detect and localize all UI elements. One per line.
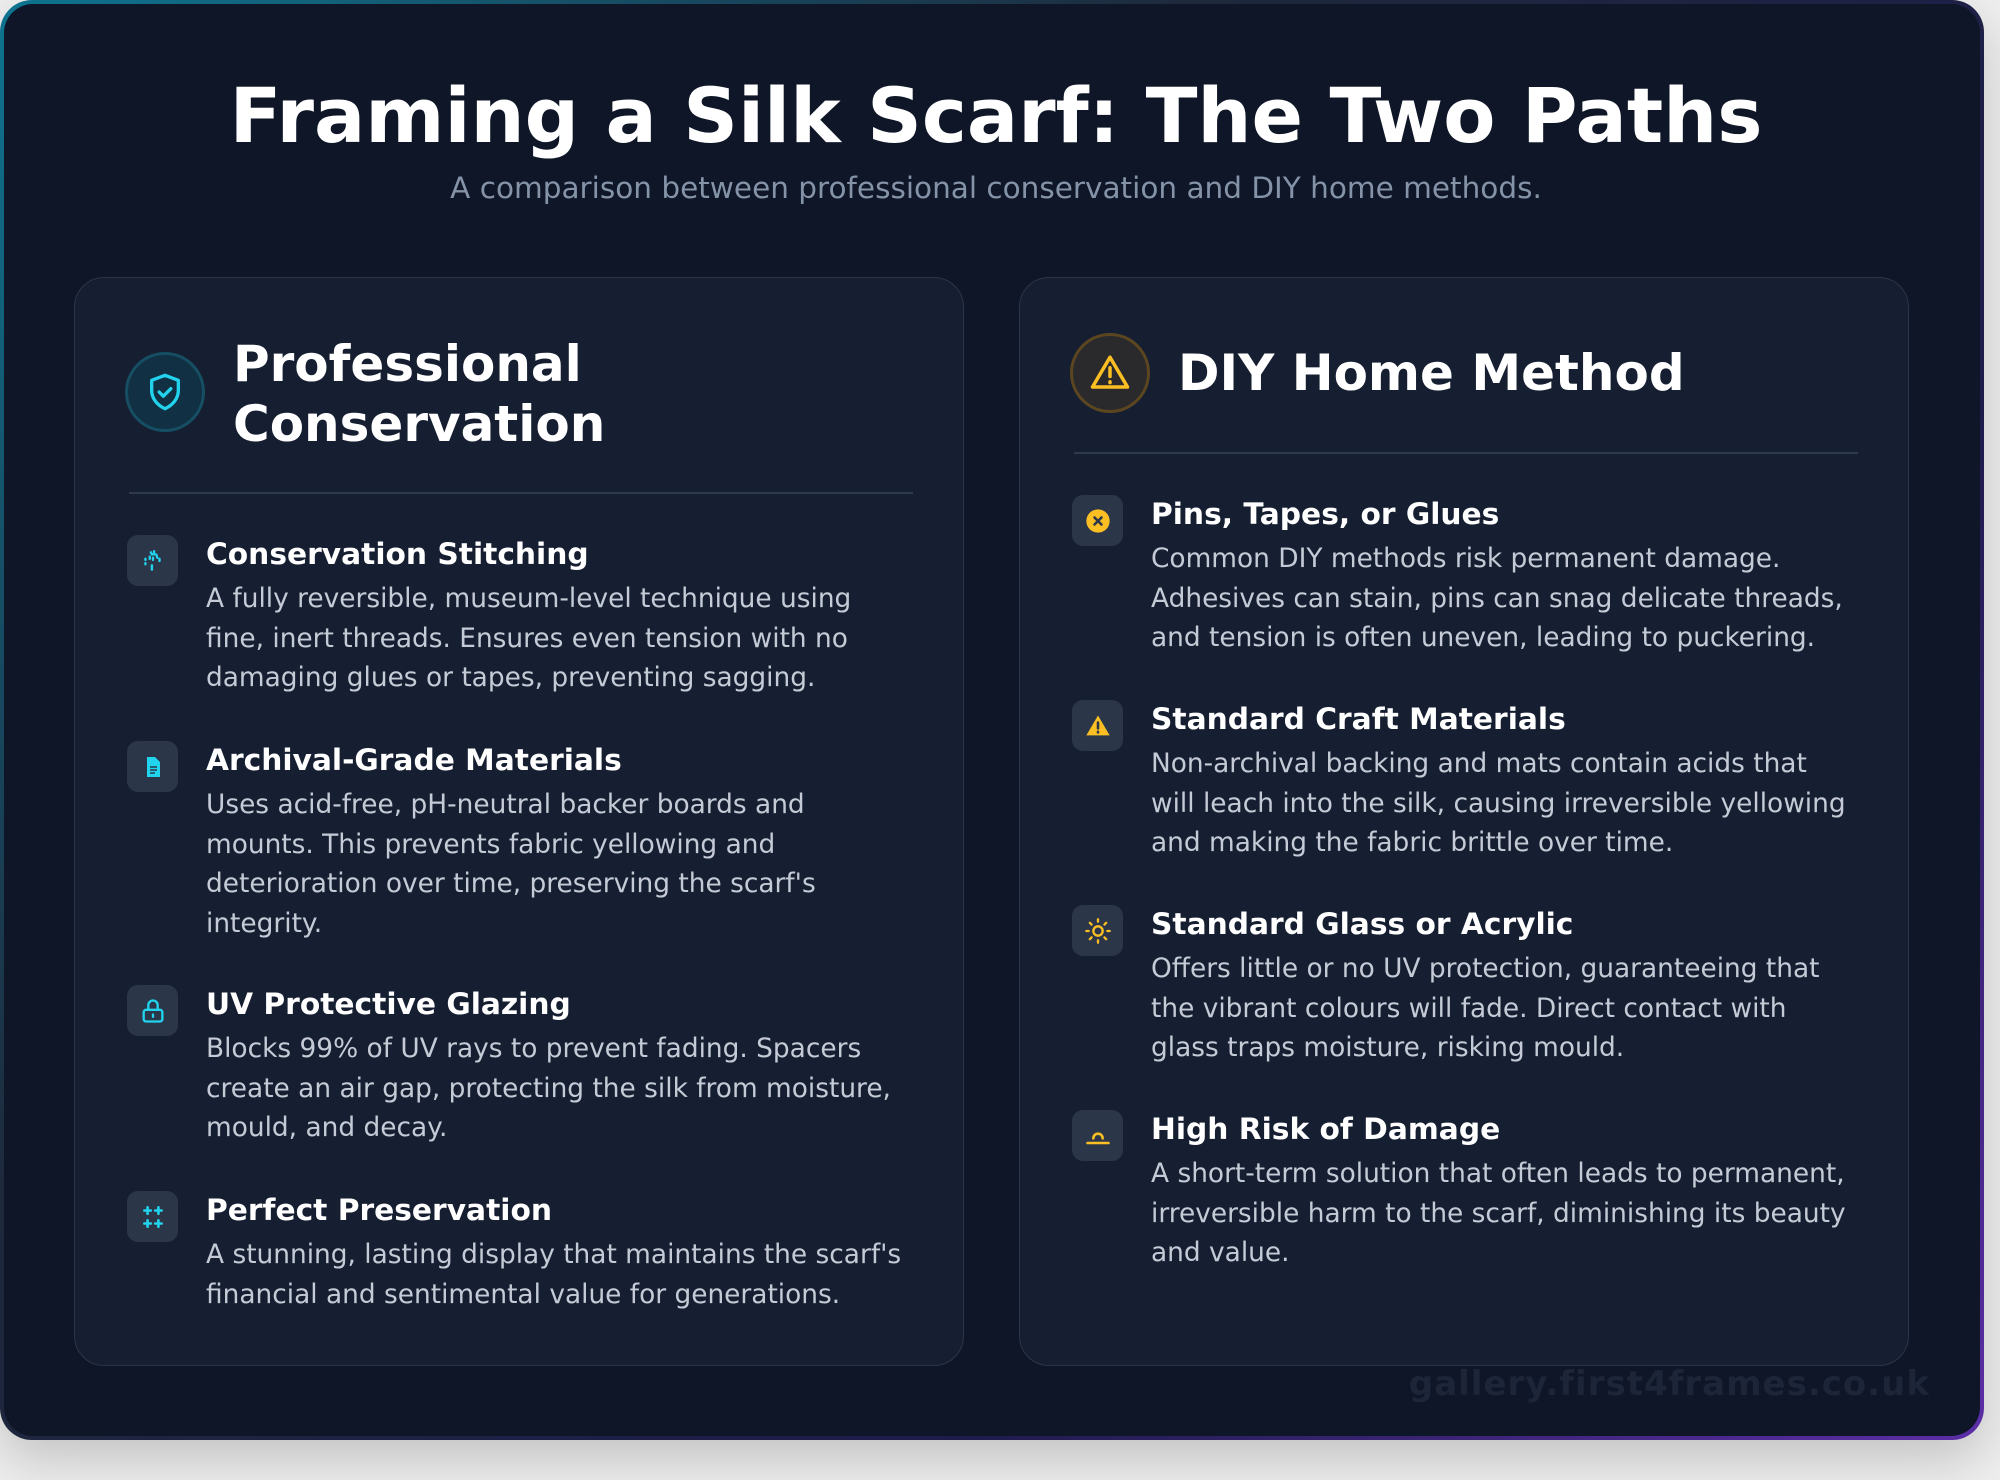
panel: professional conservation: Blocks 99% of UV rays to prevent fading. Spacers create an air gap, protecting the silk from moisture, mould, and decay. bbox=[206, 1033, 891, 1143]
panel: professional conservation: Perfect Preservation bbox=[206, 1193, 552, 1228]
item: UV glazing bbox=[127, 985, 891, 1143]
icon: shield bbox=[125, 352, 205, 432]
icon: warning triangle bbox=[1072, 700, 1123, 751]
watermark: gallery.first4frames.co.uk bbox=[1409, 1364, 1930, 1404]
heading: Conservation bbox=[233, 395, 605, 453]
icon: sparkles bbox=[127, 1191, 178, 1242]
panel: DIY home method: Offers little or no UV protection, guaranteeing that the vibrant colours will fade. Direct contact with glass traps moisture, risking mould. bbox=[1151, 953, 1820, 1063]
item: standard craft materials bbox=[1072, 700, 1846, 858]
icon: x circle bbox=[1072, 495, 1123, 546]
heading: DIY Home Method bbox=[1178, 344, 1685, 402]
panel: DIY home method: Pins, Tapes, or Glues bbox=[1151, 497, 1499, 532]
item: conservation stitching bbox=[127, 535, 851, 693]
title: Framing a Silk Scarf: The Two Paths bbox=[229, 71, 1763, 160]
panel: DIY home method: High Risk of Damage bbox=[1151, 1112, 1500, 1147]
panel: professional conservation: Conservation Stitching bbox=[206, 537, 589, 572]
item: standard glass bbox=[1072, 905, 1820, 1063]
panel: professional conservation: UV Protective Glazing bbox=[206, 987, 571, 1022]
icon: document bbox=[127, 741, 178, 792]
icon: lock bbox=[127, 985, 178, 1036]
icon: warning bbox=[1070, 333, 1150, 413]
icon: sunset bbox=[1072, 1110, 1123, 1161]
panel: professional conservation bbox=[74, 277, 964, 1366]
panel: professional conservation: A fully reversible, museum-level technique using fine, inert threads. Ensures even tension with no damaging glues or tapes, preventing sagging. bbox=[206, 583, 851, 693]
panel: professional conservation: Uses acid-free, pH-neutral backer boards and mounts. This prevents fabric yellowing and deterioration over time, preserving the scarf's integrity. bbox=[206, 789, 816, 938]
panel: DIY home method bbox=[1019, 277, 1909, 1366]
heading: Professional bbox=[233, 335, 582, 393]
item: perfect preservation bbox=[127, 1191, 901, 1310]
panel: DIY home method: Non-archival backing and mats contain acids that will leach into the silk, causing irreversible yellowing and making the fabric brittle over time. bbox=[1151, 748, 1846, 858]
panel: DIY home method: Standard Glass or Acrylic bbox=[1151, 907, 1573, 942]
item: high risk bbox=[1072, 1110, 1846, 1268]
panel: DIY home method: Standard Craft Materials bbox=[1151, 702, 1566, 737]
icon: sun bbox=[1072, 905, 1123, 956]
panel: DIY home method: Common DIY methods risk permanent damage. Adhesives can stain, pins can snag delicate threads, and tension is often uneven, leading to puckering. bbox=[1151, 543, 1843, 653]
icon: stitching bbox=[127, 535, 178, 586]
panel: DIY home method: A short-term solution that often leads to permanent, irreversible harm to the scarf, diminishing its beauty and value. bbox=[1151, 1158, 1846, 1268]
item: pins tapes glues bbox=[1072, 495, 1843, 653]
heading bbox=[233, 335, 605, 453]
panel: professional conservation: A stunning, lasting display that maintains the scarf's financial and sentimental value for generations. bbox=[206, 1239, 901, 1310]
panel: professional conservation: Archival-Grade Materials bbox=[206, 743, 622, 778]
item: archival materials bbox=[127, 741, 816, 938]
subtitle: A comparison between professional conservation and DIY home methods. bbox=[450, 171, 1542, 205]
